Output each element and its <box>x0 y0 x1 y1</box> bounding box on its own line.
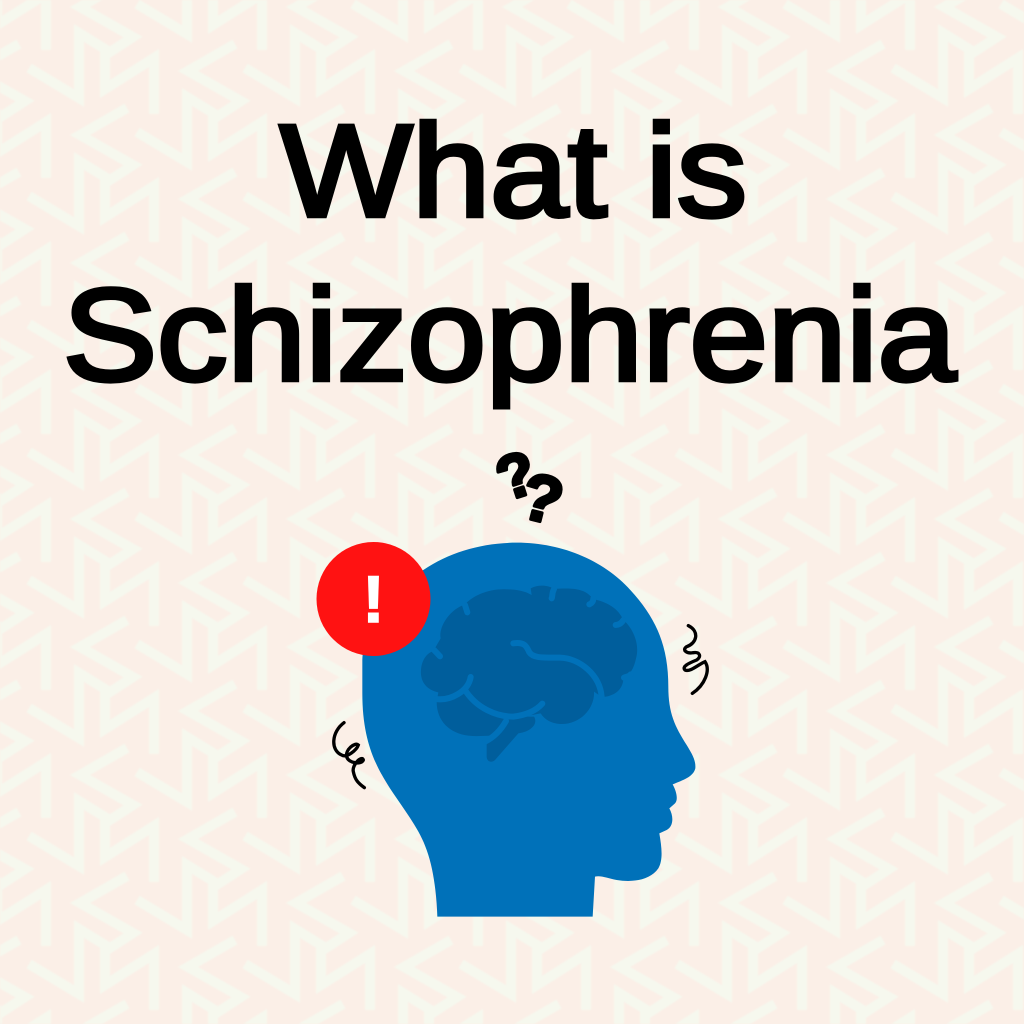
squiggle right <box>684 626 707 693</box>
question mark right: ? <box>514 458 571 539</box>
title line 1: What is <box>280 97 747 244</box>
question mark left: ? <box>488 438 545 515</box>
squiggle left <box>334 723 364 788</box>
title <box>63 97 956 408</box>
head silhouette <box>362 543 695 917</box>
exclamation mark: ! <box>363 562 384 636</box>
illustration: head with brain <box>334 438 707 917</box>
red circle <box>316 542 430 656</box>
alert badge <box>316 542 430 656</box>
brain <box>421 586 637 762</box>
question marks <box>488 438 571 539</box>
brain folds <box>434 589 631 742</box>
brain silhouette <box>421 586 637 762</box>
title line 2: Schizophrenia <box>63 261 956 408</box>
